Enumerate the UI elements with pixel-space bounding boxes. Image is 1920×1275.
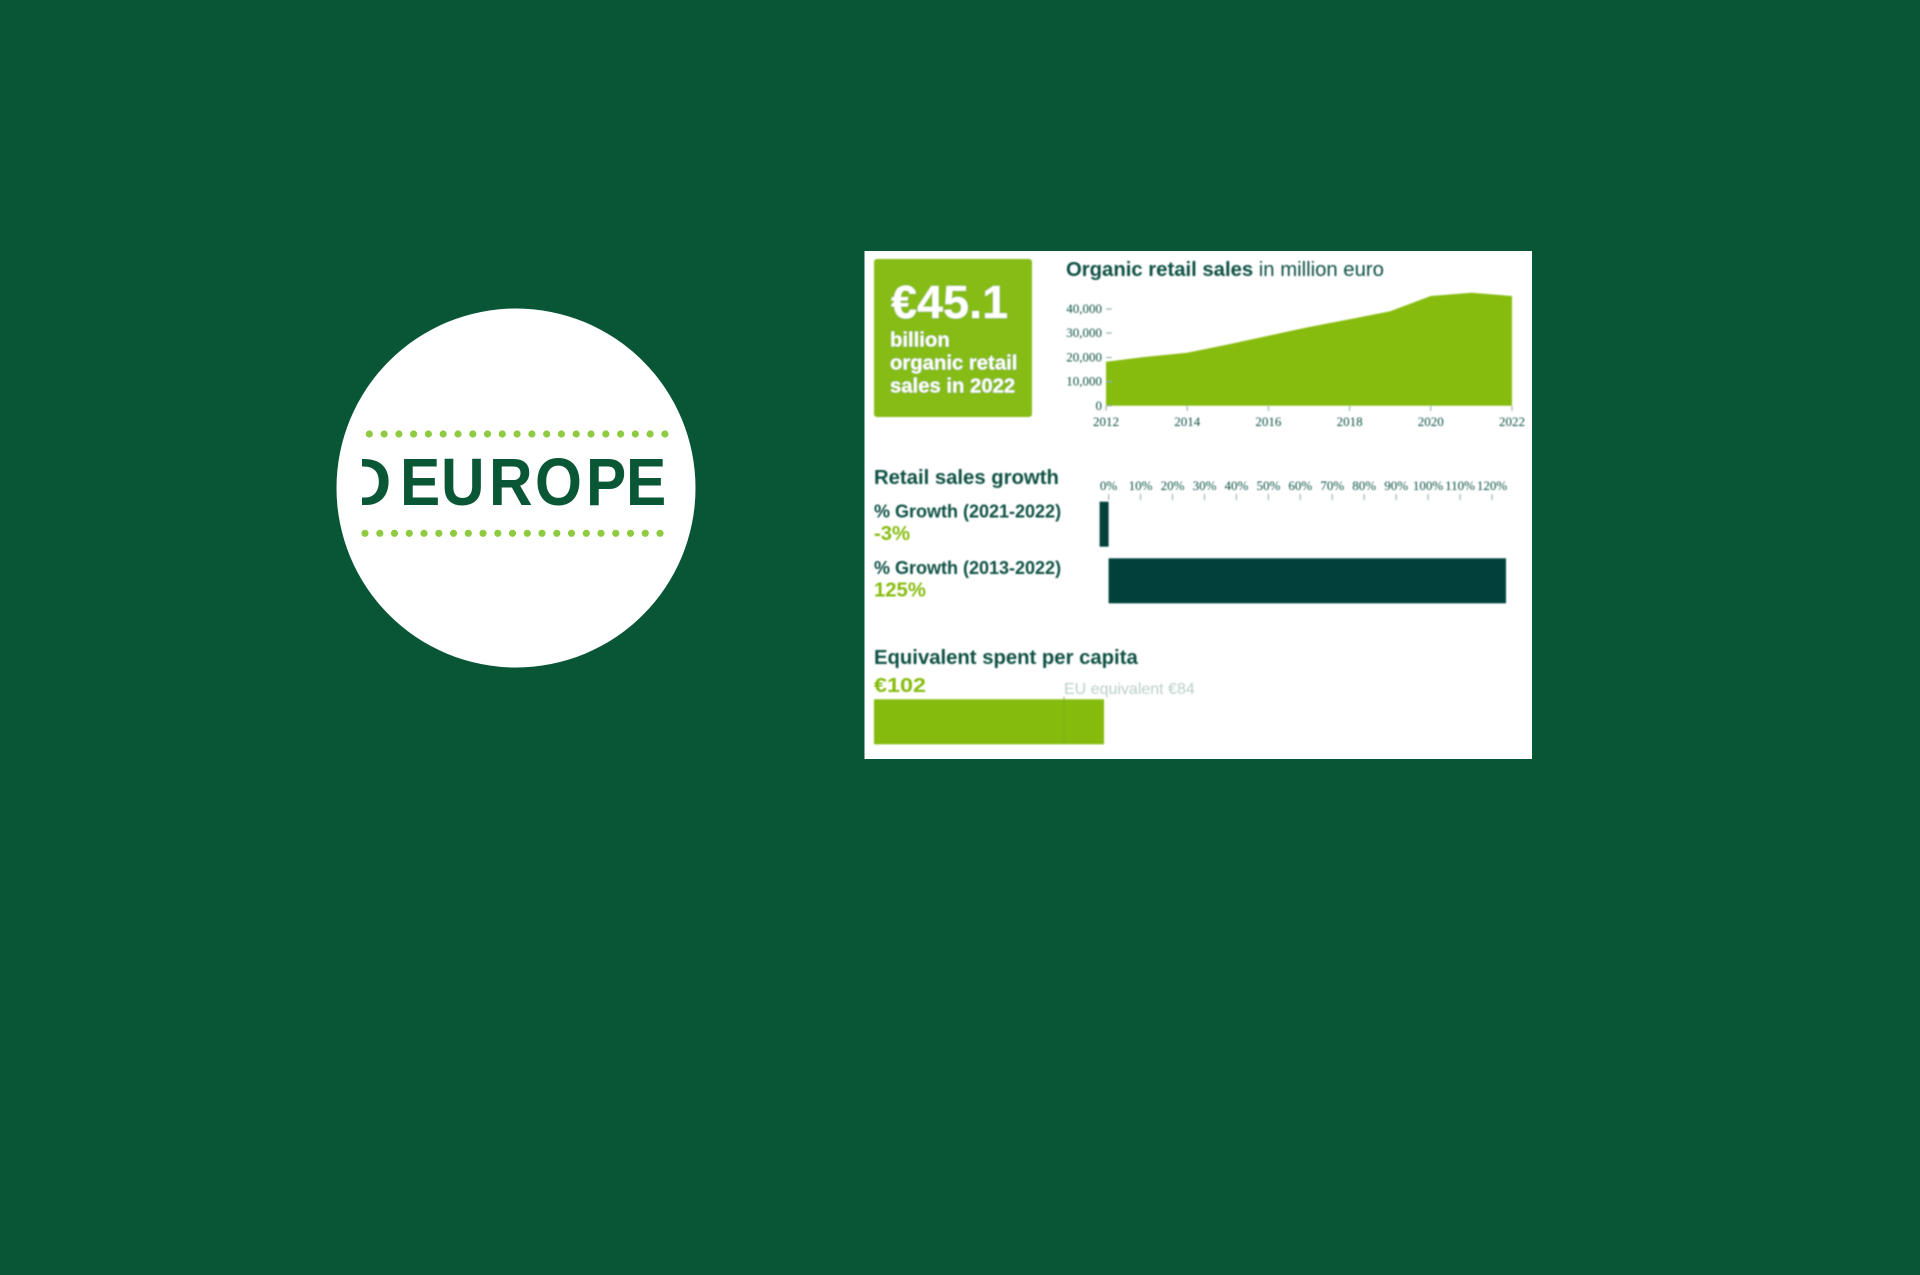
- growth axis: 50%: [1256, 478, 1280, 493]
- area chart: retail sales 2012-2022: [1066, 293, 1525, 429]
- headline caption: billion: [890, 330, 950, 352]
- EU equivalent label: EU equivalent €84: [1064, 681, 1195, 698]
- logo badge: Europe: [336, 308, 696, 668]
- y axis: 0: [1096, 398, 1102, 413]
- x axis: 2016: [1255, 414, 1282, 429]
- y axis: 30,000: [1066, 325, 1102, 340]
- growth axis: 110%: [1445, 478, 1475, 493]
- growth axis: 20%: [1161, 478, 1185, 493]
- per capita value: €102: [874, 675, 926, 697]
- y axis: 20,000: [1066, 350, 1102, 364]
- word EUROPE: EUROPE: [400, 444, 666, 520]
- bar: growth 2021-2022: [1100, 502, 1109, 547]
- x axis: [1093, 406, 1525, 429]
- y axis: [1066, 301, 1112, 413]
- headline value: €45.1: [891, 276, 1008, 328]
- growth axis: 120%: [1477, 478, 1507, 493]
- headline stat box: [874, 259, 1032, 417]
- area: [1106, 293, 1512, 406]
- growth axis: 30%: [1193, 478, 1217, 493]
- heading: spend per capita: Equivalent spent per capita: [874, 647, 1138, 669]
- label: growth 2021-2022: -3%: [874, 523, 910, 545]
- headline caption: organic retail: [890, 352, 1017, 374]
- panel background: [864, 251, 1532, 759]
- growth axis: 10%: [1129, 478, 1153, 493]
- x axis: 2014: [1174, 414, 1201, 429]
- growth axis: 80%: [1352, 478, 1376, 493]
- growth axis: 40%: [1224, 478, 1248, 493]
- growth axis: [1100, 478, 1507, 500]
- y axis: 10,000: [1066, 374, 1102, 388]
- clipped letter D: D: [343, 445, 391, 520]
- label: growth 2021-2022: % Growth (2021-2022): [874, 502, 1061, 522]
- x axis: 2012: [1093, 414, 1119, 429]
- label: growth 2013-2022: 125%: [874, 580, 926, 602]
- panel content: [874, 259, 1525, 745]
- growth axis: 100%: [1413, 478, 1443, 493]
- growth axis: 70%: [1320, 478, 1344, 493]
- top dotted line: [366, 430, 669, 438]
- y axis: 40,000: [1066, 301, 1102, 316]
- logo circle: [336, 308, 696, 668]
- label: growth 2013-2022: [874, 558, 1061, 602]
- heading: organic retail sales: Organic retail sales in million euro: [1066, 259, 1384, 281]
- heading: retail sales growth: Retail sales growth: [874, 467, 1059, 489]
- EU equivalent marker: [1063, 697, 1065, 745]
- headline caption: sales in 2022: [890, 376, 1015, 398]
- bar: growth 2013-2022: [1109, 558, 1506, 603]
- label: growth 2021-2022: [874, 502, 1061, 545]
- x axis: 2018: [1337, 414, 1363, 429]
- x axis: 2020: [1418, 414, 1444, 429]
- label: growth 2013-2022: % Growth (2013-2022): [874, 558, 1061, 578]
- x axis: 2022: [1499, 414, 1525, 429]
- data panel: [864, 251, 1532, 759]
- per capita bar: [874, 699, 1104, 744]
- bottom dotted line: [361, 530, 664, 537]
- growth axis: 60%: [1288, 478, 1312, 493]
- growth axis: 90%: [1384, 478, 1408, 493]
- growth axis: 0%: [1100, 478, 1117, 493]
